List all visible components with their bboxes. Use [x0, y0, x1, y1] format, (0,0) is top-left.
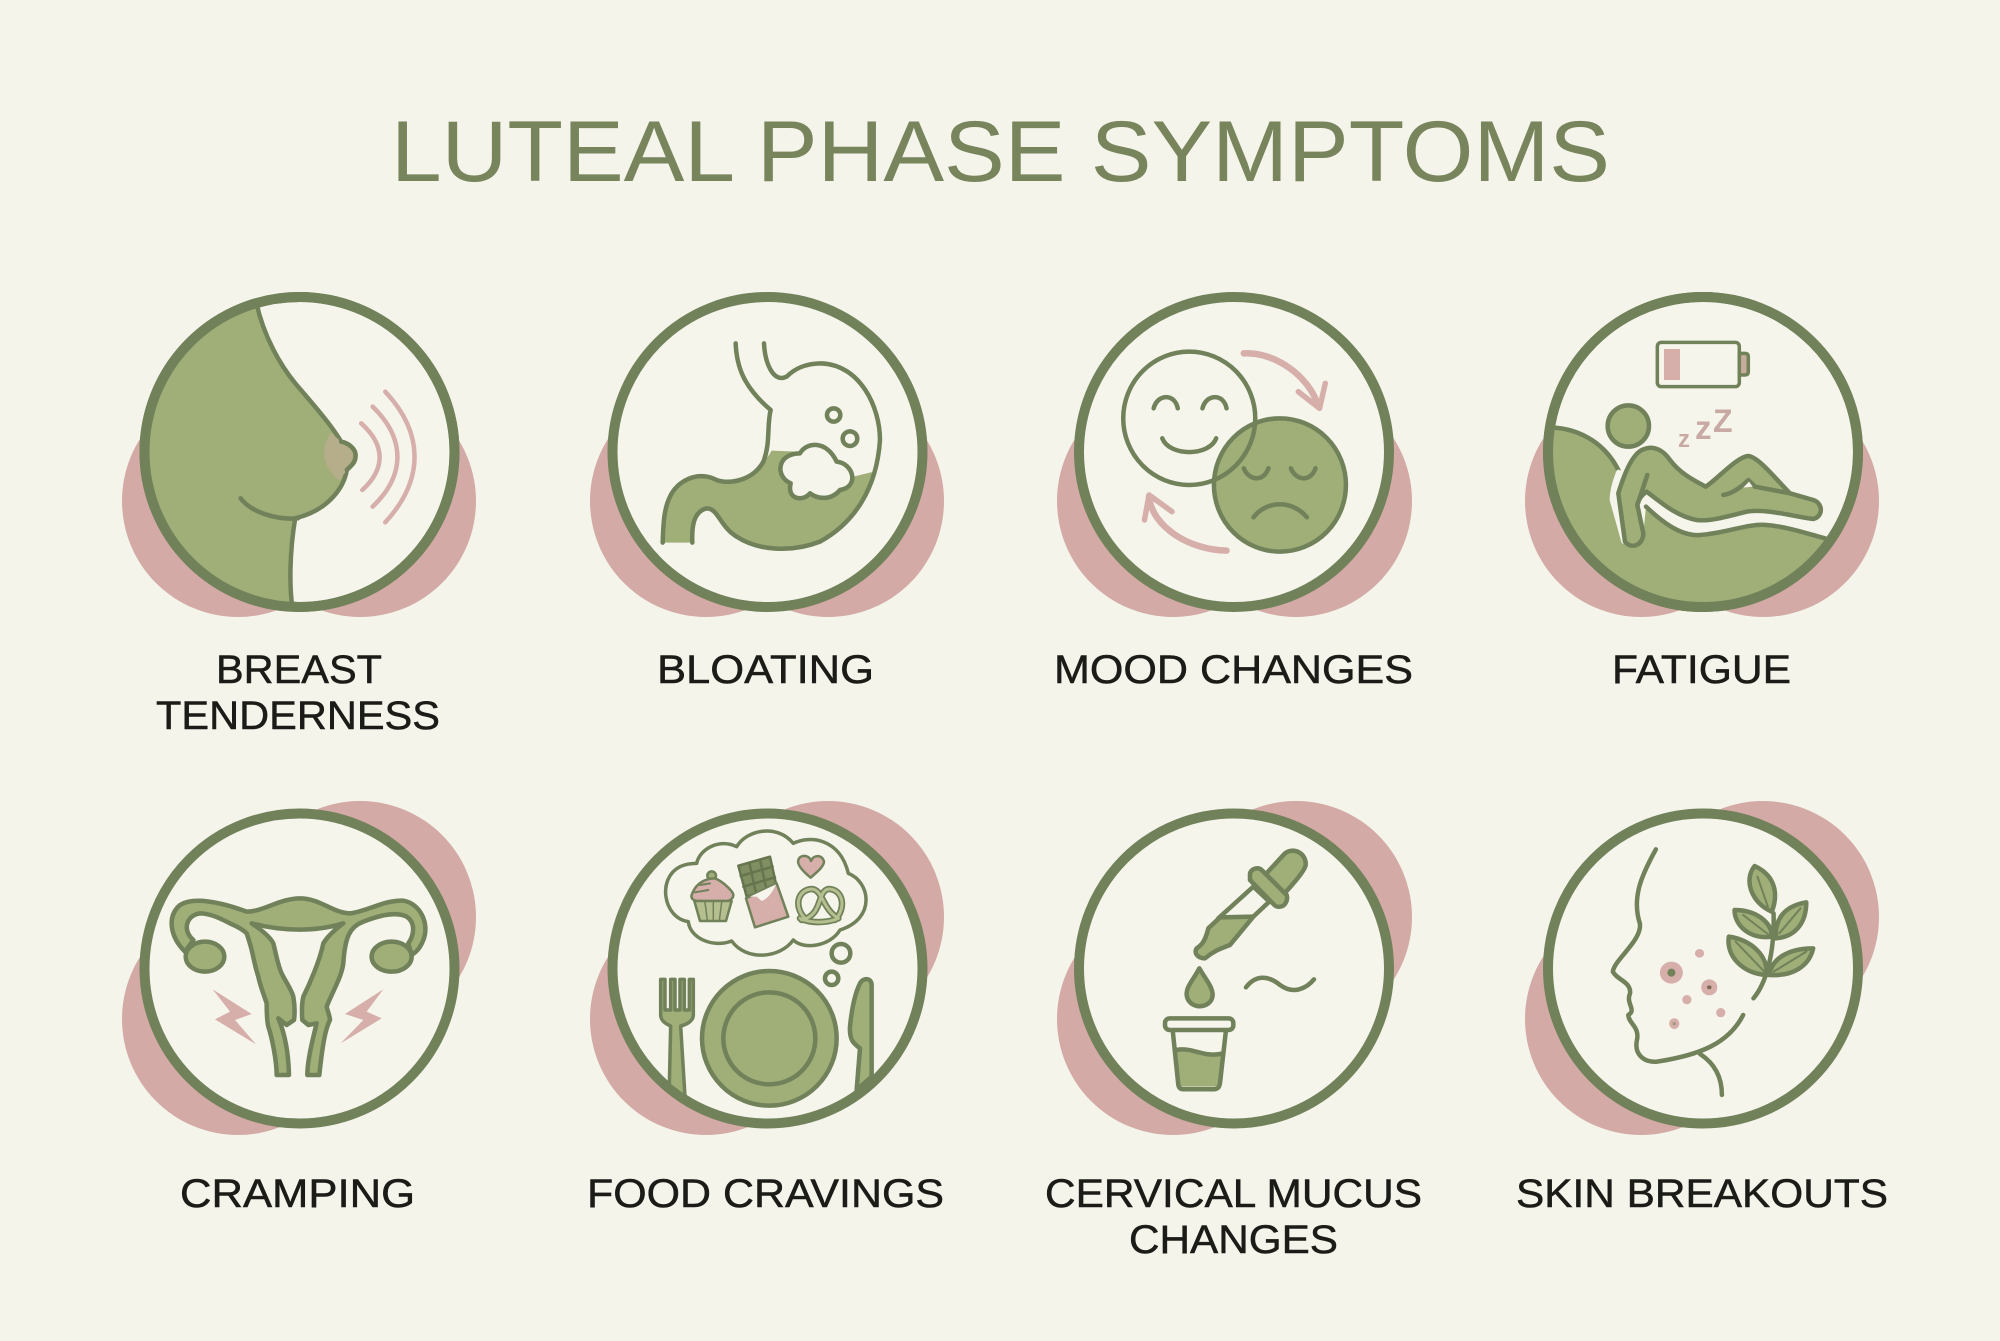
label: CERVICAL MUCUS [1045, 1172, 1422, 1216]
label [156, 648, 440, 738]
icon: breast [150, 308, 417, 602]
icon: food thought [666, 831, 866, 985]
icon: face with acne and leaf [1613, 849, 1813, 1095]
panel: cervical mucus changes [1045, 801, 1422, 1262]
label: BREAST [216, 648, 382, 692]
icon: zzz: z [1695, 409, 1712, 446]
icon: low battery [1657, 342, 1748, 387]
icon: plate and cutlery [661, 971, 872, 1106]
panel: bloating [590, 297, 944, 692]
label: BLOATING [657, 648, 874, 692]
label: CHANGES [1129, 1218, 1338, 1262]
label: FATIGUE [1612, 648, 1791, 692]
icon: zzz [1678, 403, 1733, 453]
label: MOOD CHANGES [1054, 648, 1413, 692]
icon: zzz: z [1678, 426, 1690, 453]
icon: dropper and cup [1165, 851, 1314, 1089]
panel: skin breakouts [1516, 801, 1888, 1216]
label: SKIN BREAKOUTS [1516, 1172, 1888, 1216]
icon: resting person [1553, 403, 1826, 602]
title: LUTEAL PHASE SYMPTOMS [391, 104, 1610, 200]
icon: mood faces [1123, 352, 1346, 552]
panel: mood changes [1054, 297, 1413, 692]
label: FOOD CRAVINGS [587, 1172, 944, 1216]
panel: food cravings [587, 801, 944, 1216]
icon: stomach [663, 343, 880, 549]
panel: cramping [122, 801, 476, 1216]
label [1045, 1172, 1422, 1262]
label: TENDERNESS [156, 694, 440, 738]
icon: uterus [172, 898, 425, 1075]
panel: breast tenderness [122, 290, 476, 738]
panel: fatigue [1525, 297, 1879, 692]
label: CRAMPING [180, 1172, 415, 1216]
icon: zzz: Z [1713, 403, 1733, 439]
